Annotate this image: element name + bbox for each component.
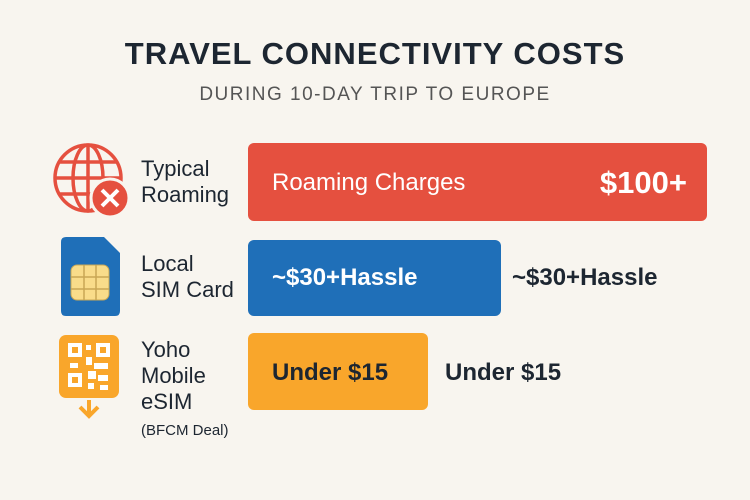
bar: yoho: Under $15 <box>272 359 388 386</box>
label: yoho esim <box>141 337 229 439</box>
bar: yoho <box>248 333 428 410</box>
icon: sim card <box>61 237 120 316</box>
label: yoho esim: Mobile <box>141 363 206 388</box>
label: yoho esim: Yoho <box>141 337 190 362</box>
text: sim outside: ~$30+Hassle <box>512 264 657 291</box>
label: yoho esim: eSIM <box>141 389 192 414</box>
bar: local sim <box>248 240 501 316</box>
bar: roaming: Roaming Charges <box>272 169 465 196</box>
title: TRAVEL CONNECTIVITY COSTS <box>125 36 625 71</box>
bar: local sim: ~$30+Hassle <box>272 264 417 291</box>
label: typical roaming <box>141 156 229 207</box>
bar: roaming: $100+ <box>600 165 687 200</box>
icon: esim qr <box>59 335 119 419</box>
label: typical roaming: Roaming <box>141 182 229 207</box>
subtitle: DURING 10-DAY TRIP TO EUROPE <box>199 84 551 105</box>
label: yoho esim: (BFCM Deal) <box>141 422 229 439</box>
label: local sim <box>141 251 234 302</box>
bar: roaming <box>248 143 707 221</box>
icon: globe with x <box>53 143 128 216</box>
label: local sim: Local <box>141 251 194 276</box>
text: yoho outside: Under $15 <box>445 359 561 386</box>
label: typical roaming: Typical <box>141 156 209 181</box>
label: local sim: SIM Card <box>141 277 234 302</box>
